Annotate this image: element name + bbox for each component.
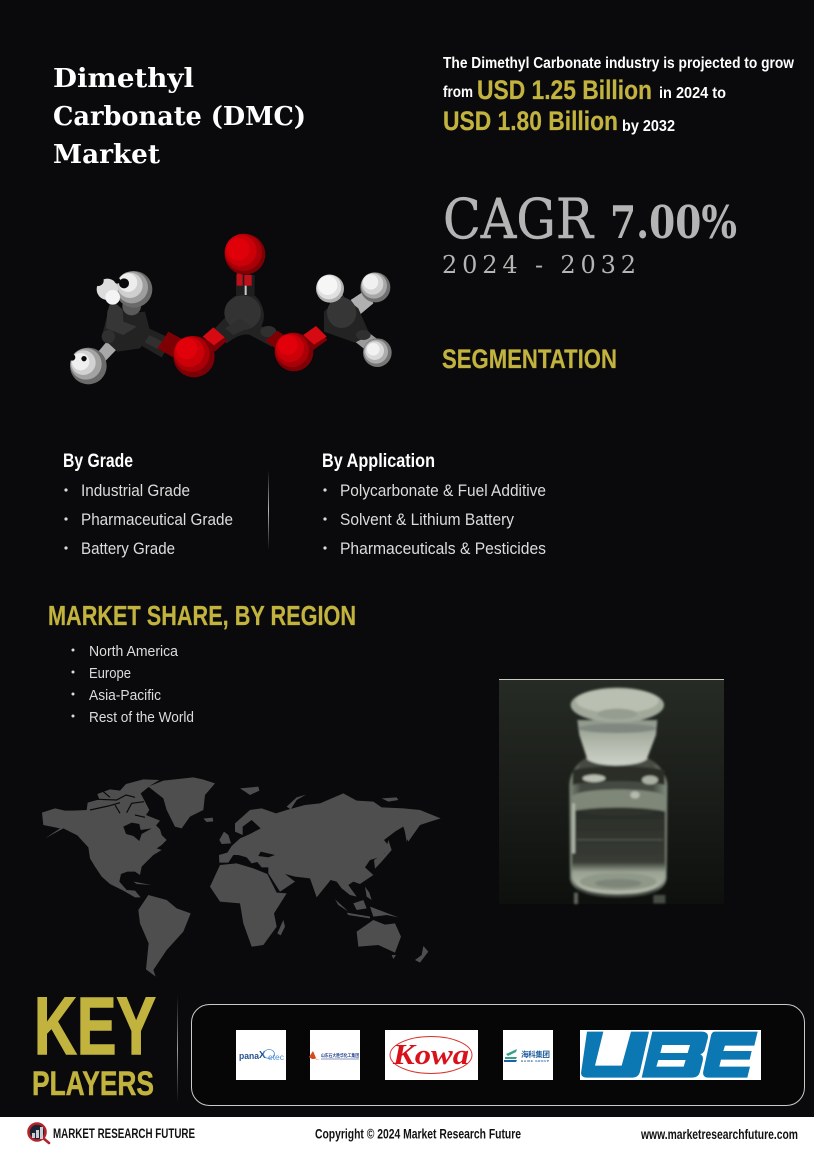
- region list: North America: [89, 643, 179, 660]
- Arctic channels: [90, 792, 145, 817]
- oxygen atom: top: [225, 234, 265, 275]
- heading: key players: PLAYERS: [32, 1065, 154, 1103]
- Madagascar: [277, 920, 285, 935]
- region list: Asia-Pacific: [89, 687, 161, 704]
- logo: haike group: HAIKE GROUP: [521, 1059, 549, 1063]
- New Zealand: [415, 946, 428, 963]
- heading: market share by region: MARKET SHARE, BY REGION: [48, 600, 356, 631]
- logo: panax etec: [236, 1030, 286, 1080]
- logo: haike group: [503, 1030, 553, 1080]
- region list: [72, 643, 194, 726]
- North America: [42, 779, 167, 897]
- South America: [138, 895, 191, 977]
- market size statement: from: [443, 84, 473, 101]
- panel: by grade: Industrial Grade: [81, 481, 190, 500]
- icon: market research future logo: [28, 1124, 49, 1143]
- hydrogen atoms: left lower: [69, 348, 107, 384]
- market size statement: by 2032: [622, 118, 675, 135]
- Japan: [374, 840, 392, 869]
- panel: key player logos: [192, 1004, 804, 1106]
- market size statement: in 2024 to: [659, 85, 726, 102]
- footer: MARKET RESEARCH FUTURE: [53, 1126, 195, 1141]
- Eurasia: [219, 793, 441, 897]
- photo: glass bottle of DMC: [499, 679, 724, 904]
- hydrogen atoms: right: [316, 272, 392, 367]
- Greenland: [148, 777, 215, 828]
- British Isles: [219, 832, 231, 844]
- CAGR: [442, 187, 737, 279]
- heading: key players: [32, 981, 156, 1103]
- logo: kowa: [385, 1030, 478, 1080]
- heading: segmentation: SEGMENTATION: [442, 344, 617, 374]
- world map: [42, 777, 441, 977]
- footer: Copyright © 2024 Market Research Future: [315, 1126, 521, 1142]
- CAGR: 2024 - 2032: [442, 251, 636, 279]
- Novaya Zemlya: [287, 795, 306, 809]
- Siberian islands: [382, 797, 398, 802]
- panel: by application: Pharmaceuticals & Pesticides: [340, 539, 546, 558]
- title: Market: [53, 140, 160, 170]
- logo: kowa: Kowa: [392, 1039, 469, 1071]
- region list: Rest of the World: [89, 709, 194, 726]
- Svalbard: [240, 787, 259, 795]
- panel: by grade: By Grade: [63, 451, 133, 472]
- Iceland: [203, 818, 213, 822]
- panel: by grade: Pharmaceutical Grade: [81, 510, 233, 529]
- logo: panax etec: X: [259, 1050, 266, 1061]
- Hudson Bay: [123, 823, 152, 841]
- logo: UBE: [580, 1030, 761, 1080]
- oxygen atom: right: [275, 326, 327, 371]
- CAGR: 7.00%: [610, 196, 737, 249]
- logo: shandong shida shenghua: 山东石大胜华化工集团: [321, 1052, 359, 1059]
- logo: panax etec: pana: [239, 1051, 260, 1061]
- title: Carbonate (DMC): [53, 102, 306, 132]
- heading: key players: KEY: [34, 981, 156, 1072]
- liquid: [572, 810, 665, 894]
- carbon atoms and bonds: [102, 295, 371, 357]
- oxygen atom: left: [173, 327, 227, 377]
- market size statement: USD 1.80 Billion: [443, 106, 618, 136]
- panel: by grade: Battery Grade: [81, 539, 175, 558]
- panel: by application: By Application: [322, 451, 435, 472]
- double bond: [236, 273, 255, 300]
- Black Sea: [258, 852, 275, 857]
- stopper: [577, 720, 657, 765]
- logo: haike group: 海科集团: [521, 1049, 550, 1059]
- Indonesia: [335, 899, 355, 918]
- panel: by application: Polycarbonate & Fuel Additive: [340, 481, 546, 500]
- logo: shandong shida shenghua: [309, 1030, 360, 1080]
- Caribbean: [133, 882, 152, 885]
- title: [53, 64, 306, 170]
- footer: [0, 1117, 814, 1150]
- oxygen bonds: [157, 331, 292, 357]
- CAGR: CAGR: [443, 187, 594, 251]
- hydrogen bonds: [90, 289, 384, 368]
- Australia: [357, 920, 401, 953]
- panel: by application: Solvent & Lithium Battery: [340, 510, 514, 529]
- hydrogen atoms: left upper: [93, 271, 152, 315]
- Kamchatka: [404, 825, 413, 842]
- bottle body: [569, 757, 667, 897]
- market size statement: USD 1.25 Billion: [477, 75, 652, 105]
- icon: DMC molecule: [69, 234, 392, 384]
- Africa: [210, 863, 287, 947]
- Philippines: [365, 887, 372, 900]
- panel: by grade: [63, 451, 233, 558]
- title: Dimethyl: [53, 64, 194, 94]
- market size statement: [443, 55, 794, 136]
- panel: by application: [322, 451, 546, 558]
- region list: Europe: [89, 665, 131, 682]
- logo: panax etec: etec: [268, 1053, 284, 1062]
